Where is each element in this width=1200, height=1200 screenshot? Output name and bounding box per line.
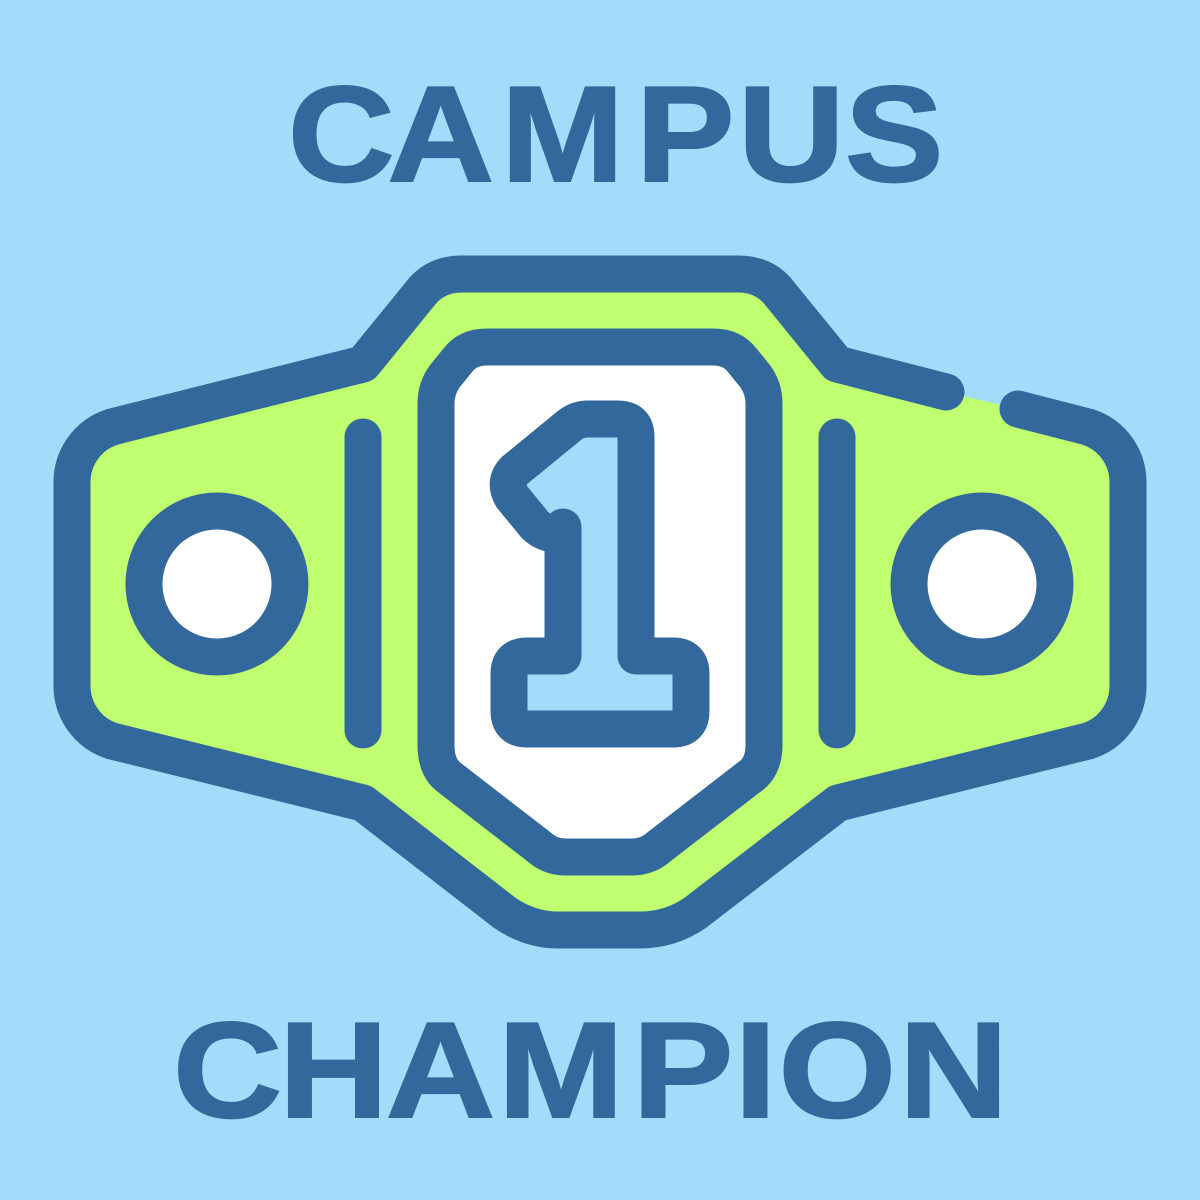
right vertical bar — [818, 437, 856, 730]
right stud — [909, 511, 1055, 657]
belt centre shield — [436, 347, 764, 857]
belt body — [72, 274, 1128, 930]
icon: championship belt — [72, 274, 1128, 930]
left vertical bar — [344, 437, 382, 730]
left stud — [144, 511, 290, 657]
title: CAMPUS: CAMPUS — [288, 59, 943, 211]
title: CHAMPION: CHAMPION — [173, 995, 1008, 1146]
numeral 1 — [508, 419, 691, 729]
